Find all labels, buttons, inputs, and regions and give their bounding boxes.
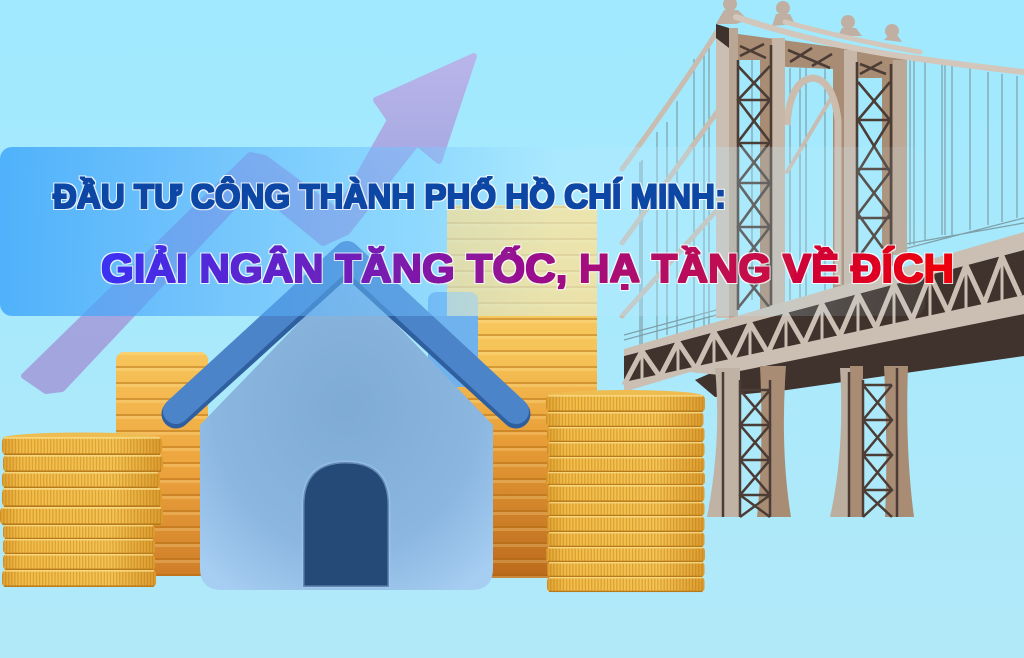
pale tint on coins under panel (447, 205, 597, 316)
deck under beam (695, 314, 1024, 397)
house chimney (428, 292, 478, 387)
illustration: rising arrow (24, 56, 474, 391)
illustration: suspension bridge (622, 0, 1024, 517)
coin stack: back left (116, 352, 208, 576)
arch between pillars (787, 78, 838, 285)
coin stack: back centre (447, 205, 597, 578)
tower lattice (738, 44, 891, 310)
tower upper section (716, 24, 907, 320)
coin stack: front left (0, 432, 163, 587)
upper chord (624, 232, 1024, 356)
truss web (624, 256, 1020, 385)
bridge hanger cables (624, 47, 1024, 345)
translucent title panel (0, 147, 925, 316)
coin stack: front right (546, 390, 705, 592)
house body (200, 273, 493, 590)
bridge deck and truss (624, 232, 1024, 397)
tower finials and top cables (716, 0, 1024, 72)
title line 2: GIẢI NGÂN TĂNG TỐC, HẠ TẦNG VỀ ĐÍCH (101, 245, 954, 291)
lower piers (707, 366, 914, 517)
house (176, 254, 516, 590)
main suspension cables (622, 30, 833, 316)
house roof (176, 254, 516, 414)
title line 1: ĐẦU TƯ CÔNG THÀNH PHỐ HỒ CHÍ MINH: (53, 177, 726, 216)
lower chord (624, 295, 1024, 392)
house door (303, 462, 389, 587)
truss dark band (624, 250, 1024, 385)
title (53, 177, 954, 291)
